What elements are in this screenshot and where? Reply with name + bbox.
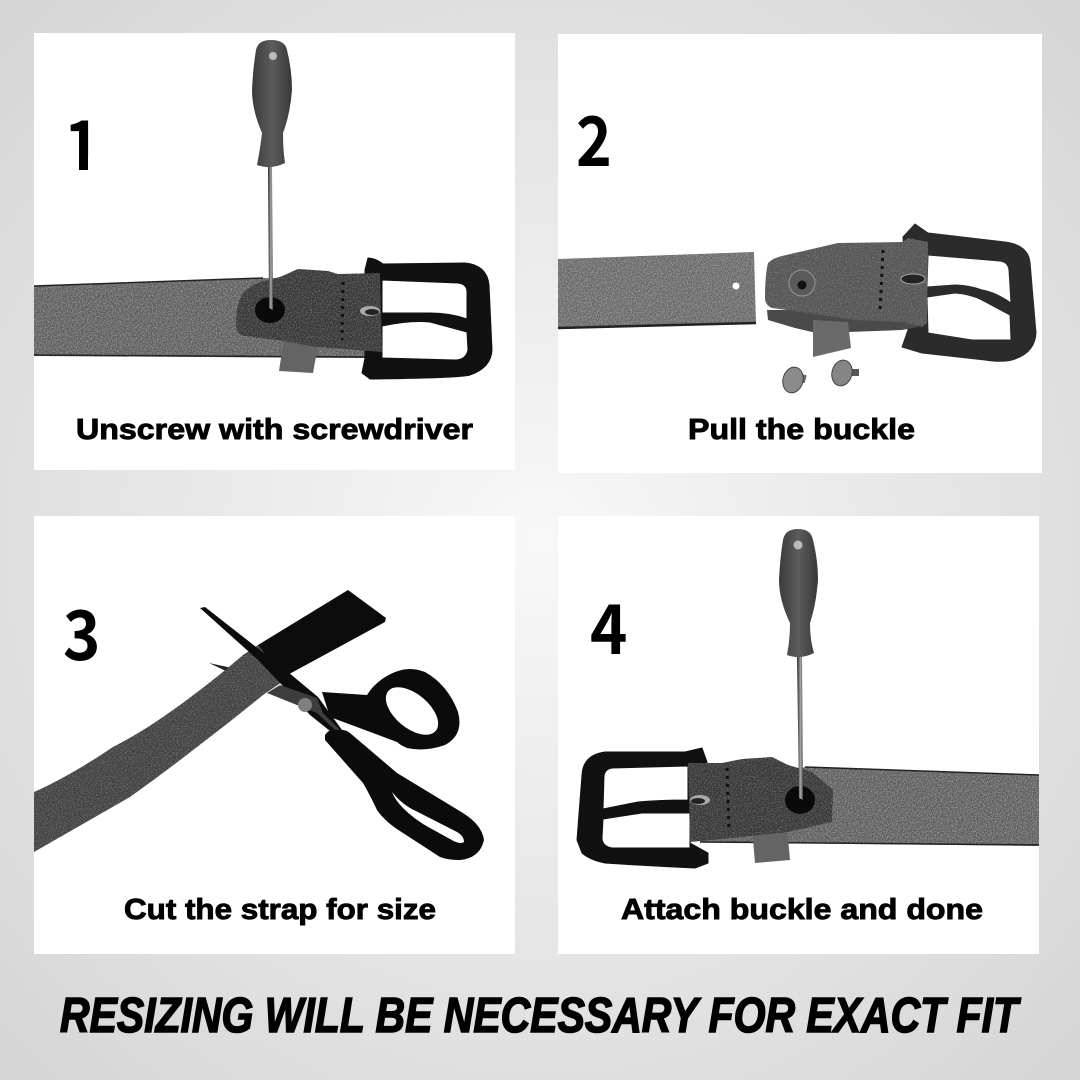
icon: belt strap — [558, 252, 756, 329]
icon: stitching — [342, 282, 343, 340]
icon: stitching — [880, 250, 883, 312]
icon: keeper loop — [752, 827, 790, 863]
icon: buckle slit — [360, 306, 380, 316]
icon: screw hole — [255, 297, 285, 323]
icon: buckle slit — [690, 795, 710, 805]
icon: belt strap — [34, 278, 365, 358]
icon: screw hole — [785, 786, 815, 814]
icon: small blade — [209, 663, 232, 671]
icon: belt buckle — [362, 258, 492, 379]
panel: step 3 cut — [34, 516, 515, 954]
icon: keeper loop — [813, 320, 851, 357]
icon: leather flap — [236, 269, 382, 352]
step number 3: 3 — [63, 581, 100, 681]
panel: step 2 pull — [558, 34, 1042, 473]
icon: eyelet — [789, 270, 815, 296]
icon: leather flap — [688, 757, 833, 842]
icon: buckle slit — [901, 274, 925, 284]
icon: buckle — [902, 224, 1036, 361]
icon: scissors — [200, 607, 484, 860]
icon: buckle — [577, 748, 708, 868]
step number 1: 1 — [64, 90, 101, 190]
caption: Unscrew with screwdriver — [76, 414, 473, 446]
icon: belt strap — [34, 645, 285, 852]
icon: belt strap — [700, 767, 1039, 846]
icon: screws — [780, 358, 859, 395]
icon: screwdriver — [252, 40, 292, 310]
icon: strap offcut — [258, 590, 386, 680]
step number 2: 2 — [576, 86, 612, 186]
step number 4: 4 — [590, 575, 627, 675]
caption: Pull the buckle — [688, 414, 915, 446]
icon: leather flap — [765, 238, 928, 327]
icon: flap underside — [767, 310, 918, 332]
icon: strap hole — [732, 282, 740, 290]
caption: Attach buckle and done — [621, 894, 983, 926]
panel: step 4 attach — [558, 516, 1039, 954]
icon: screwdriver — [779, 529, 818, 800]
panel: step 1 unscrew — [34, 33, 515, 470]
caption: Cut the strap for size — [124, 894, 436, 926]
icon: keeper loop — [279, 338, 319, 373]
icon: stitching — [727, 768, 729, 830]
